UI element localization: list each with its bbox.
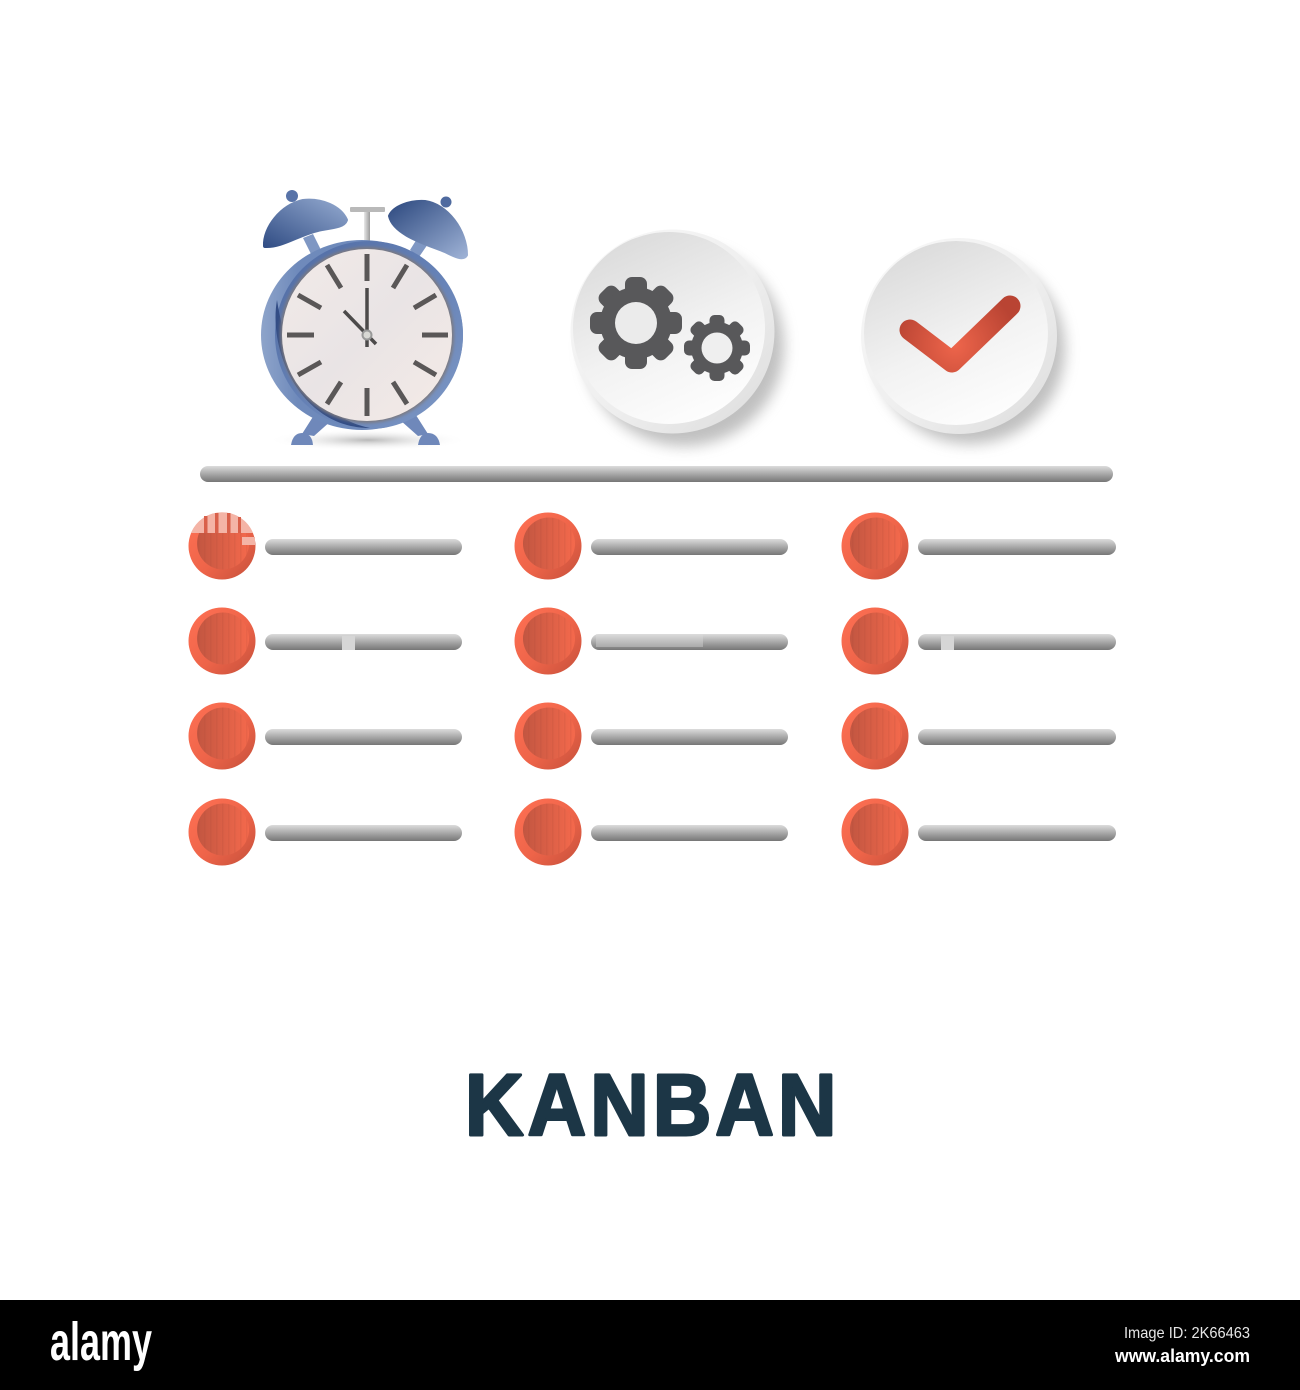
small gear [684,315,750,381]
right bell [390,196,466,257]
footer logo: alamy [50,1312,152,1372]
check mark [910,306,1010,362]
item 2-1 [514,512,788,580]
website: www.alamy.com [1114,1346,1250,1366]
icon: check button [861,238,1065,444]
clock body [261,240,463,430]
left bell [265,190,346,246]
clock hands [344,288,376,347]
list column 2 [514,512,788,866]
icon: gears button [570,230,784,446]
item 3-3 [842,702,1116,770]
large gear [590,277,682,369]
item 1-1 [188,512,462,580]
item 1-4 [188,798,462,866]
bell stems [303,234,430,257]
list column 1 [188,512,462,866]
item 3-2 [842,608,1116,674]
item 2-3 [514,702,788,770]
item 3-4 [842,798,1116,866]
title: KANBAN [465,1056,841,1154]
clock ticks [287,254,448,416]
header divider bar [200,466,1113,482]
item 2-2 [514,608,788,674]
footer band [0,1300,1300,1390]
list column 3 [842,512,1116,866]
item 1-3 [188,702,462,770]
item 2-4 [514,798,788,866]
clock legs [291,412,440,445]
icon: alarm clock [261,190,468,451]
item 1-2 [188,608,462,674]
image id: Image ID: 2K66463 [1124,1325,1250,1342]
plunger [350,207,385,242]
item 3-1 [842,512,1116,580]
